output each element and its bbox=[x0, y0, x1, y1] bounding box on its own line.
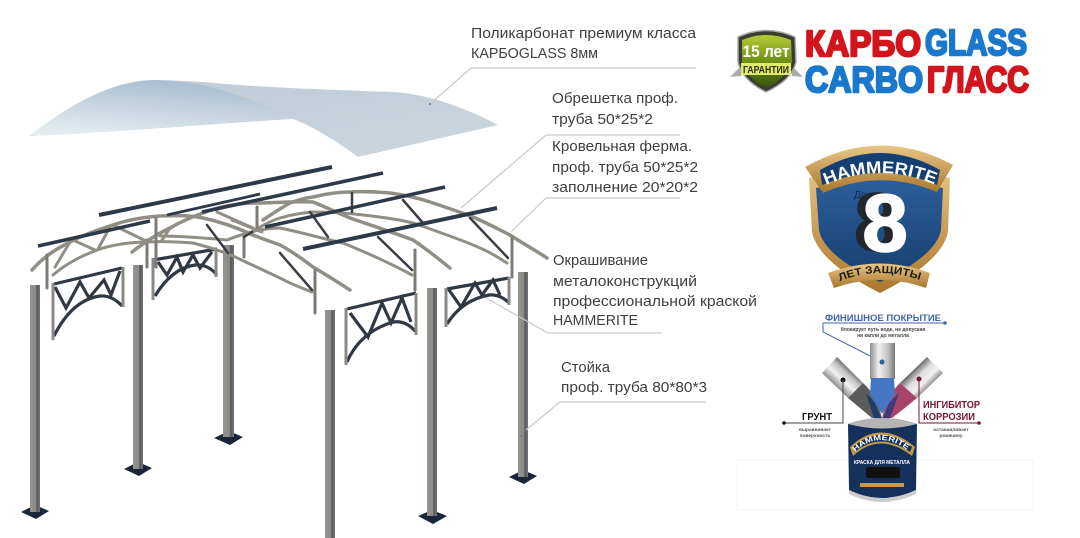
illustration: dark corner brackets bbox=[54, 249, 509, 362]
label: painting: металоконструкций bbox=[553, 273, 697, 290]
icon: 15 year guarantee shield: 15 лет bbox=[742, 42, 790, 61]
icon: Hammerite 8 years shield: ЛЕТ ЗАЩИТЫ bbox=[839, 266, 922, 282]
logo: KARBOGLASS bbox=[805, 22, 1029, 100]
label: finish coat: ФИНИШНОЕ ПОКРЫТИЕ bbox=[825, 313, 941, 324]
icon: 15 year guarantee shield: ГАРАНТИИ bbox=[743, 64, 789, 76]
logo: KARBOGLASS: CARBO bbox=[805, 59, 923, 100]
icon: 15 year guarantee shield bbox=[730, 30, 803, 92]
icon: Hammerite 8 years shield bbox=[805, 146, 953, 293]
illustration: bracket legs bbox=[53, 250, 509, 365]
icon: Hammerite 8 years shield: 8 bbox=[862, 178, 908, 269]
label: lathing: труба 50*25*2 bbox=[552, 111, 653, 128]
label: painting: HAMMERITE bbox=[553, 312, 638, 329]
label: lathing bbox=[552, 90, 678, 128]
label: primer: выравнивает bbox=[799, 428, 832, 433]
label: corrosion inhibitor: ИНГИБИТОР bbox=[923, 399, 980, 411]
logo: KARBOGLASS: GLASS bbox=[925, 22, 1027, 63]
icon: Hammerite 8 years shield: HAMMERITE bbox=[822, 161, 938, 184]
logo: KARBOGLASS: ГЛАСС bbox=[927, 59, 1029, 100]
icon: paint can: HAMMERITE bbox=[852, 434, 910, 452]
label: roof truss: проф. труба 50*25*2 bbox=[552, 159, 698, 176]
icon: paint can: КРАСКА ДЛЯ МЕТАЛЛА bbox=[854, 460, 910, 466]
label: post bbox=[561, 359, 707, 396]
label: corrosion inhibitor: ржавчину bbox=[939, 434, 963, 439]
leader dots bbox=[429, 103, 522, 437]
illustration: polycarbonate roof sheet bbox=[29, 80, 498, 157]
label: lathing: Обрешетка проф. bbox=[552, 90, 678, 107]
label: finish coat: блокирует путь воде, не допуская bbox=[841, 326, 925, 333]
label: corrosion inhibitor: КОРРОЗИИ bbox=[923, 411, 975, 423]
icon: Hammerite 8 years shield: 8 bbox=[854, 177, 900, 268]
illustration: support posts bbox=[21, 245, 537, 538]
label: polycarbonate bbox=[471, 25, 697, 62]
label: finish coat bbox=[823, 313, 947, 362]
label: roof truss: Кровельная ферма. bbox=[552, 138, 692, 155]
logo: KARBOGLASS: КАРБО bbox=[805, 23, 921, 64]
label: corrosion inhibitor bbox=[919, 379, 981, 439]
label: post: проф. труба 80*80*3 bbox=[561, 379, 707, 396]
label: polycarbonate: КАРБОGLASS 8мм bbox=[471, 45, 598, 62]
label: painting: Окрашивание bbox=[553, 252, 648, 269]
label: polycarbonate: Поликарбонат премиум класса bbox=[471, 25, 697, 42]
label: primer: поверхность bbox=[800, 434, 830, 439]
label: primer bbox=[782, 380, 843, 439]
icon: Hammerite 8 years shield: До bbox=[854, 190, 867, 201]
label: roof truss bbox=[552, 138, 698, 196]
icon: paint can bbox=[848, 418, 917, 502]
illustration: roof trusses bbox=[32, 192, 547, 313]
label: primer: ГРУНТ bbox=[802, 411, 833, 423]
label: post: Стойка bbox=[561, 359, 611, 376]
label: corrosion inhibitor: останавливает bbox=[933, 428, 969, 433]
label: finish coat: ни капли до металла bbox=[857, 333, 909, 339]
label: painting: профессиональной краской bbox=[553, 293, 757, 310]
panel: Hammerite layers diagram bbox=[736, 313, 1034, 510]
illustration: dark purlins bbox=[38, 167, 497, 249]
icon: three pipes bbox=[822, 343, 943, 418]
label: painting bbox=[553, 252, 757, 329]
label: roof truss: заполнение 20*20*2 bbox=[552, 179, 698, 196]
leader lines bbox=[430, 68, 706, 430]
